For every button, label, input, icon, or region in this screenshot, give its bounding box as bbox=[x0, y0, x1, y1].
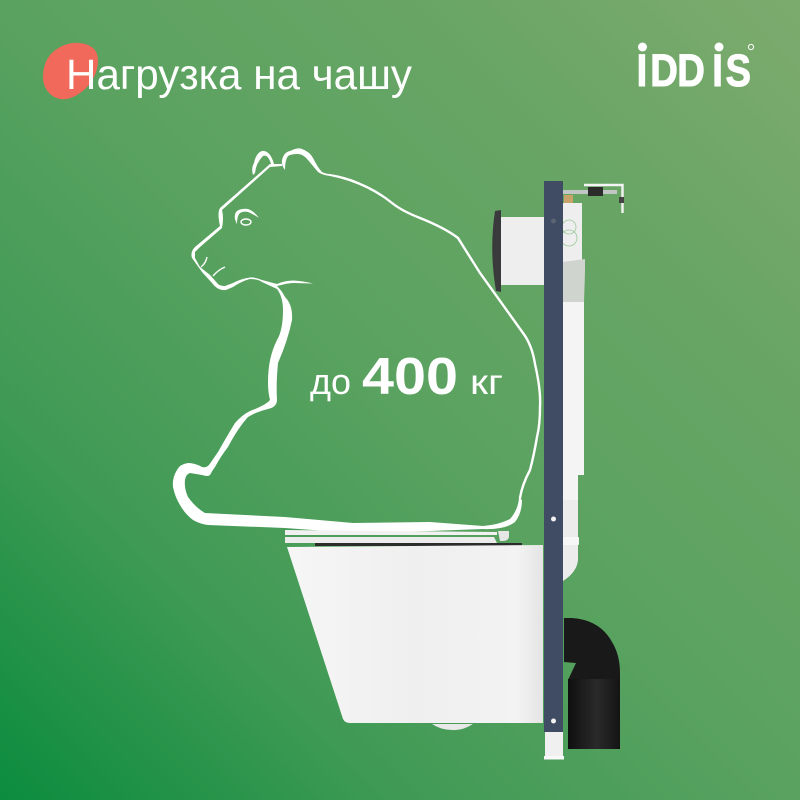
bear right ear and upper back bbox=[282, 148, 370, 190]
seat bbox=[285, 537, 497, 543]
black gasket bbox=[315, 543, 522, 546]
pipe collar bbox=[563, 537, 579, 545]
logo: iDDIS: IDDIS bbox=[637, 45, 751, 96]
bear left ear bbox=[252, 151, 274, 175]
lid bbox=[285, 530, 497, 535]
load label: up to 400 kg bbox=[310, 348, 503, 406]
flush plate bbox=[492, 210, 501, 292]
frame middle hole bbox=[551, 516, 556, 522]
installation pipes behind frame bbox=[561, 203, 585, 581]
lower bend pipe bbox=[563, 500, 578, 581]
elbow lower sleeve bbox=[568, 679, 620, 749]
load label: up to 400 kg: до bbox=[310, 361, 351, 402]
frame bottom hole bbox=[551, 718, 556, 724]
flush box bbox=[501, 217, 544, 285]
frame upright bbox=[544, 181, 563, 732]
bear back contour bbox=[350, 180, 540, 498]
bear eye bbox=[241, 219, 251, 225]
brass fitting bbox=[564, 195, 573, 203]
hinge bbox=[498, 531, 509, 541]
load label: up to 400 kg: кг bbox=[470, 363, 503, 402]
upper white tank bbox=[563, 203, 582, 265]
toilet seat and lid bbox=[285, 530, 522, 546]
steel rod bbox=[563, 190, 617, 194]
black drain elbow bbox=[564, 618, 620, 749]
toilet bowl bbox=[287, 545, 543, 723]
foot base bbox=[544, 756, 564, 760]
bracket screw bbox=[619, 197, 624, 203]
white bracket bbox=[584, 185, 622, 213]
translucent valve block bbox=[563, 259, 585, 302]
bowl bottom bump bbox=[432, 724, 473, 730]
black clamp bbox=[588, 187, 603, 196]
green tank outline marks bbox=[561, 220, 577, 246]
bear head, neck, paw and base contour bbox=[173, 164, 522, 533]
bear nostril line bbox=[201, 257, 207, 267]
bear outline bbox=[173, 148, 522, 533]
bear brow bbox=[235, 209, 259, 224]
top bracket hardware bbox=[563, 185, 624, 213]
white foot bbox=[545, 732, 563, 756]
bear mouth line bbox=[213, 267, 225, 276]
red blob accent bbox=[43, 43, 98, 99]
frame top bolt bbox=[551, 218, 556, 224]
elbow body bbox=[564, 618, 620, 680]
steel frame bbox=[544, 181, 564, 760]
title: Нагрузка на чашу bbox=[66, 51, 412, 99]
white down pipe bbox=[563, 302, 584, 520]
load label: up to 400 kg: 400 bbox=[362, 348, 458, 406]
